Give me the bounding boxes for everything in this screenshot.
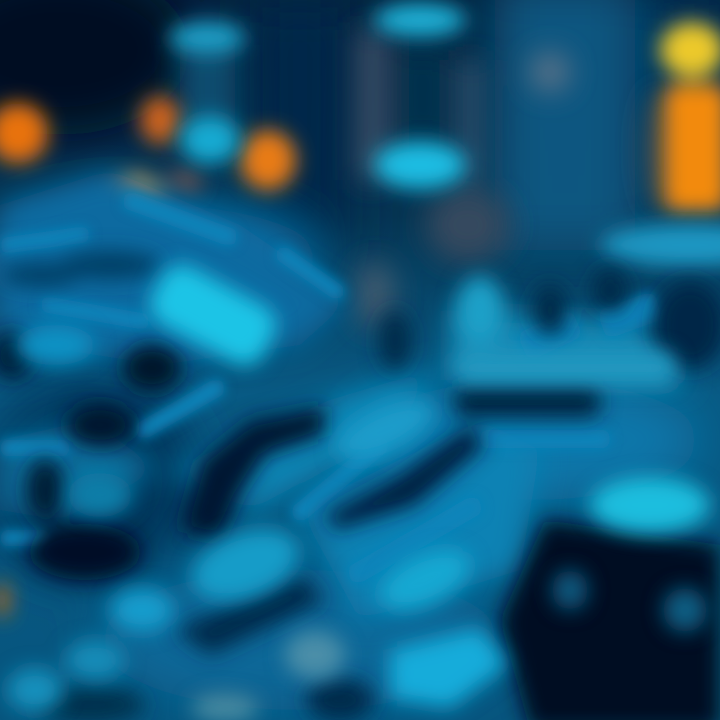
circuit board: dark gaps: [0, 251, 720, 720]
lights: cyan panels at top: [169, 3, 720, 267]
circuit board: bright cyan chips: [7, 257, 710, 720]
circuit board: diagonal blue bands: [0, 190, 663, 586]
circuit board: mid-blue masses: [0, 170, 690, 620]
towers: dark teal columns: [180, 30, 674, 329]
